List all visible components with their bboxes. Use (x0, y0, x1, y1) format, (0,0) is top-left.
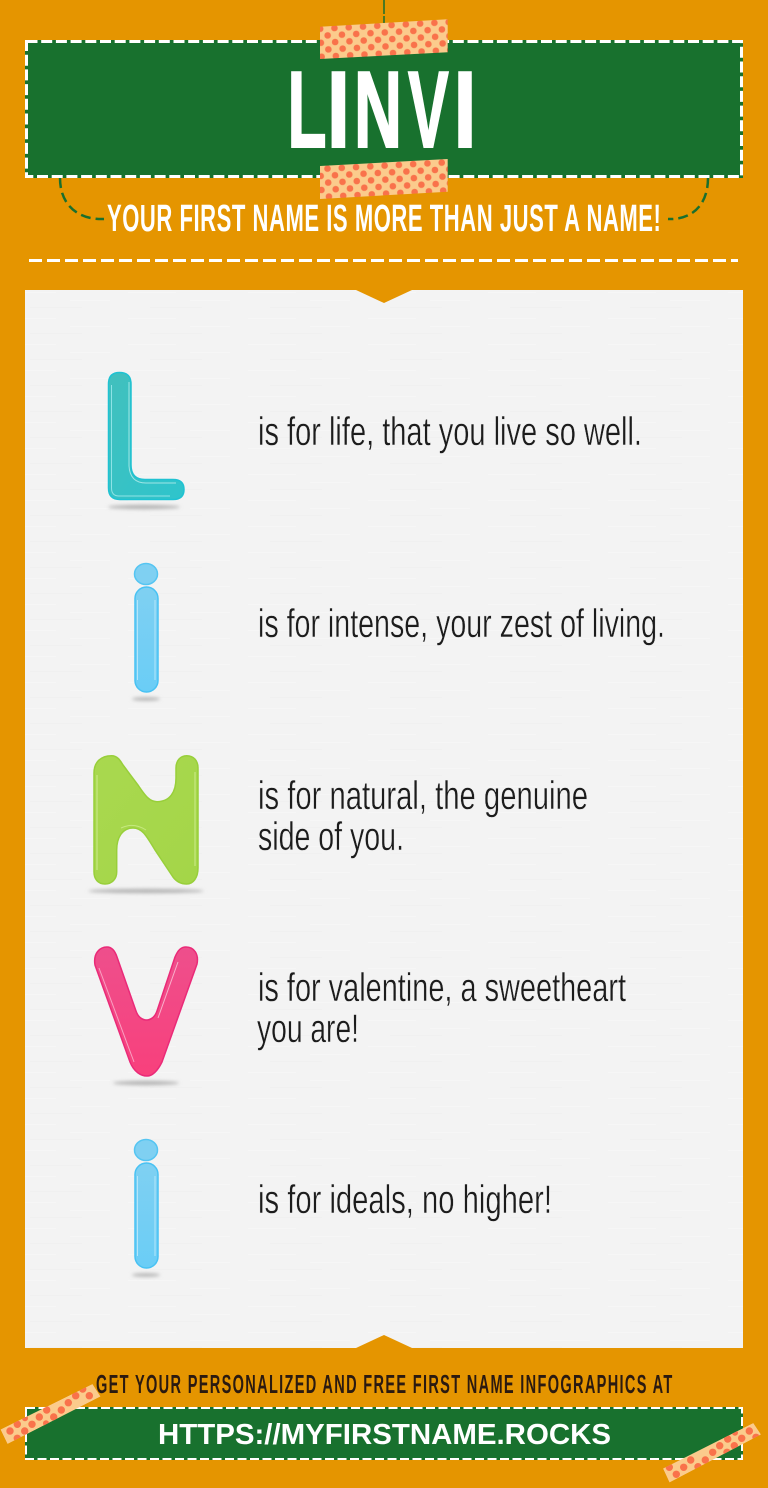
title: I (454, 48, 477, 171)
text: V lines (257, 966, 626, 1051)
left dashed connector (60, 178, 104, 219)
tape: footer left (0, 1384, 100, 1444)
subtitle: YOUR FIRST NAME IS MORE THAN JUST A NAME! (107, 197, 661, 240)
tape: top (320, 19, 448, 59)
tape: bottom of banner (320, 159, 448, 199)
icon: letter i (132, 564, 160, 701)
title: L (288, 48, 327, 170)
footer prompt: GET YOUR PERSONALIZED AND FREE FIRST NAME INFOGRAPHICS AT (96, 1371, 672, 1399)
footer url: HTTPS://MYFIRSTNAME.ROCKS (158, 1419, 611, 1451)
icon: letter N (88, 756, 204, 893)
title: N (354, 49, 402, 171)
title (288, 48, 477, 171)
header banner (25, 40, 743, 178)
text: V lines: is for valentine, a sweetheart (258, 966, 626, 1010)
tape: footer right (663, 1423, 761, 1482)
hanging thread (383, 0, 385, 24)
icon: letter i second (132, 1140, 160, 1277)
panel: letters (25, 290, 743, 1348)
icon: letter L (108, 372, 184, 509)
text: N lines: is for natural, the genuine (258, 774, 588, 818)
text: second I line: is for ideals, no higher! (258, 1178, 552, 1222)
title: I (327, 48, 350, 171)
text: N lines: side of you. (258, 815, 404, 859)
right dashed connector (668, 178, 708, 219)
footer banner (25, 1407, 743, 1460)
title: V (408, 48, 449, 170)
icon: letter V (95, 947, 197, 1085)
text: V lines: you are! (257, 1007, 359, 1051)
text: N lines (258, 774, 588, 859)
